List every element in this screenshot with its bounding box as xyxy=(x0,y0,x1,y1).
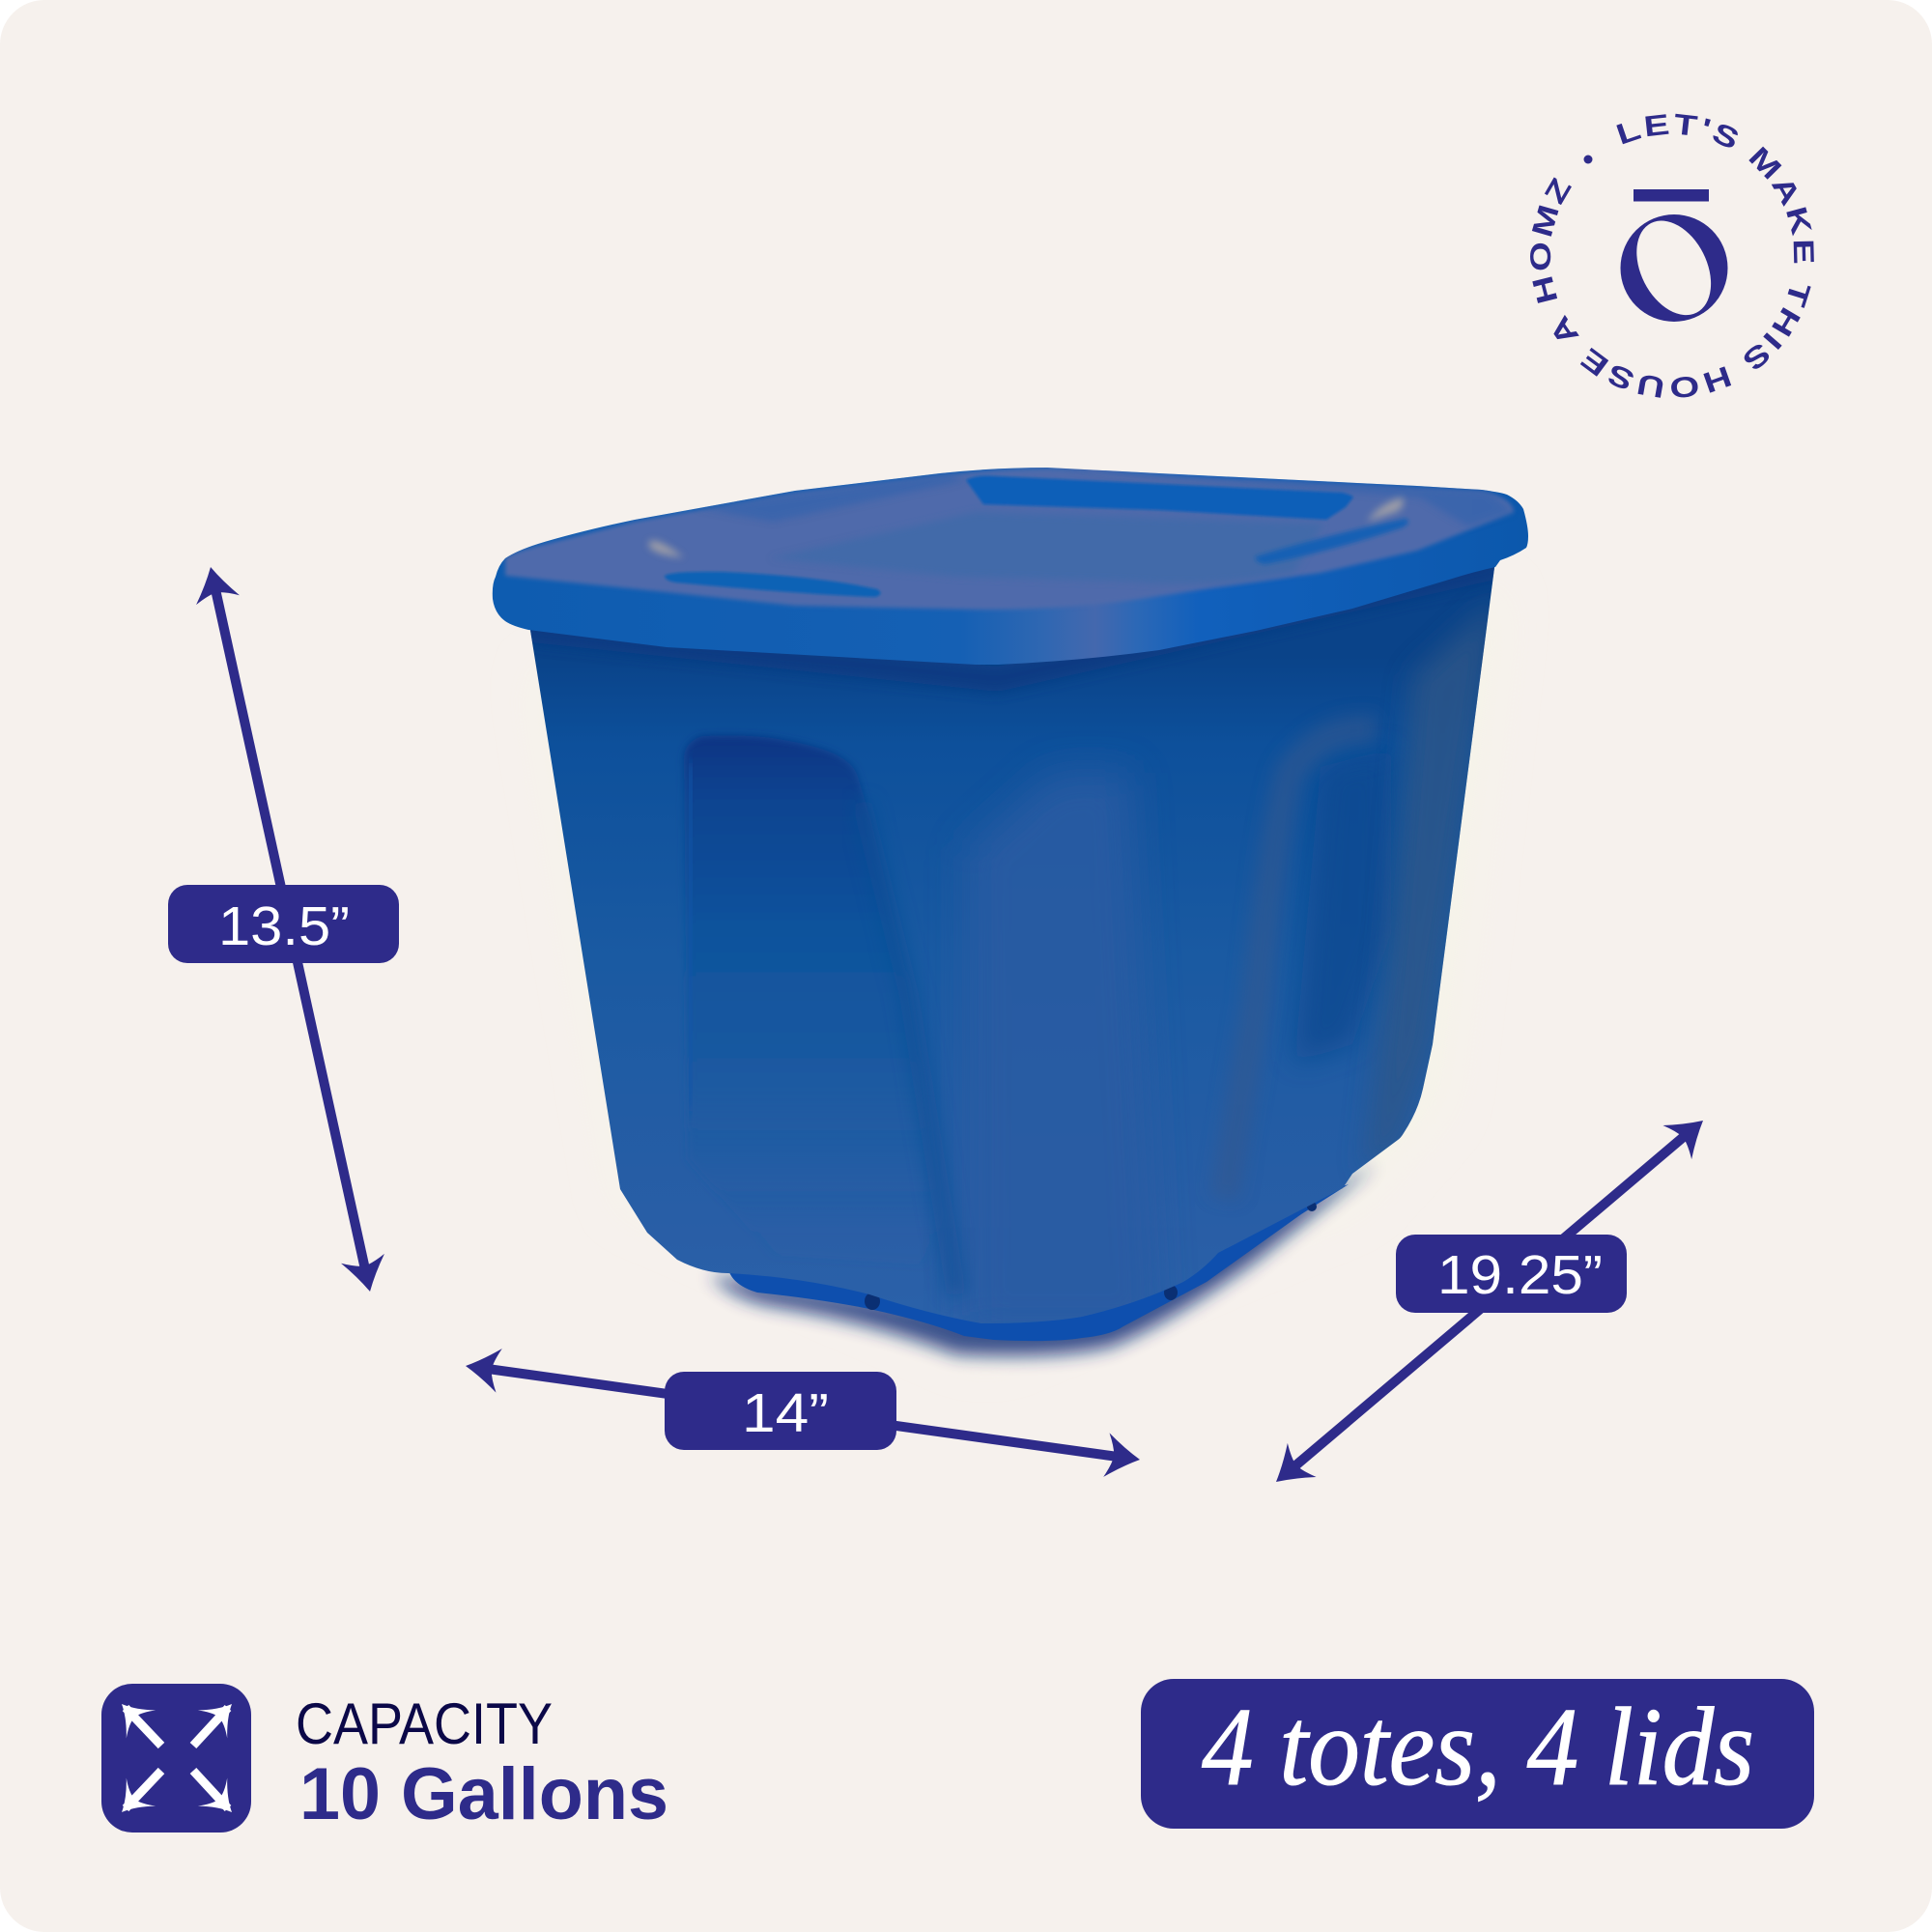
shadow under lid xyxy=(530,567,1495,690)
recess right shadow xyxy=(908,950,968,1296)
height label: 13.5” xyxy=(218,895,350,957)
lid back recess xyxy=(966,475,1353,520)
height dimension arrow xyxy=(189,562,391,1296)
brand badge xyxy=(1530,114,1814,398)
width label: 14” xyxy=(742,1382,829,1444)
lid tan highlights xyxy=(649,497,1404,557)
depth dimension arrow xyxy=(1262,1103,1718,1499)
tote photo xyxy=(483,454,1546,1372)
lid top face xyxy=(505,469,1514,610)
quantity callout: 4 totes, 4 lids xyxy=(1202,1686,1754,1808)
body right ridge xyxy=(1225,729,1377,1198)
lid top rim xyxy=(696,469,1514,526)
capacity value: 10 Gallons xyxy=(299,1753,668,1835)
capacity label: CAPACITY xyxy=(296,1691,553,1756)
width label xyxy=(665,1372,896,1450)
recess left shadow xyxy=(690,763,692,1111)
tote body xyxy=(529,567,1495,1323)
tote contact shadow xyxy=(710,1164,1377,1356)
tote lid xyxy=(493,468,1528,665)
capacity icon xyxy=(101,1684,251,1833)
height label xyxy=(168,885,399,963)
lid inner panel xyxy=(770,512,1323,583)
tote base notches xyxy=(865,1202,1317,1310)
depth label xyxy=(1396,1235,1627,1313)
lid right slot xyxy=(1256,519,1408,564)
body centre light band xyxy=(962,769,1142,1103)
tote base skirt xyxy=(727,1184,1349,1341)
icon: four outward arrows xyxy=(107,1690,246,1826)
depth label: 19.25” xyxy=(1437,1244,1603,1306)
badge macron bar xyxy=(1634,189,1709,201)
lid front slot xyxy=(665,572,881,597)
badge letter o xyxy=(1621,209,1727,327)
badge separator dot xyxy=(1584,155,1592,164)
body right inner dark panel xyxy=(1291,769,1383,1062)
badge circular text: LET'S MAKE THIS HOUSE A HOMZ xyxy=(1530,114,1814,398)
body right edge strip xyxy=(1364,599,1497,1174)
soft halo behind tote xyxy=(541,599,1497,1352)
body left handle recess xyxy=(682,733,904,1062)
width dimension arrow xyxy=(463,1344,1143,1482)
